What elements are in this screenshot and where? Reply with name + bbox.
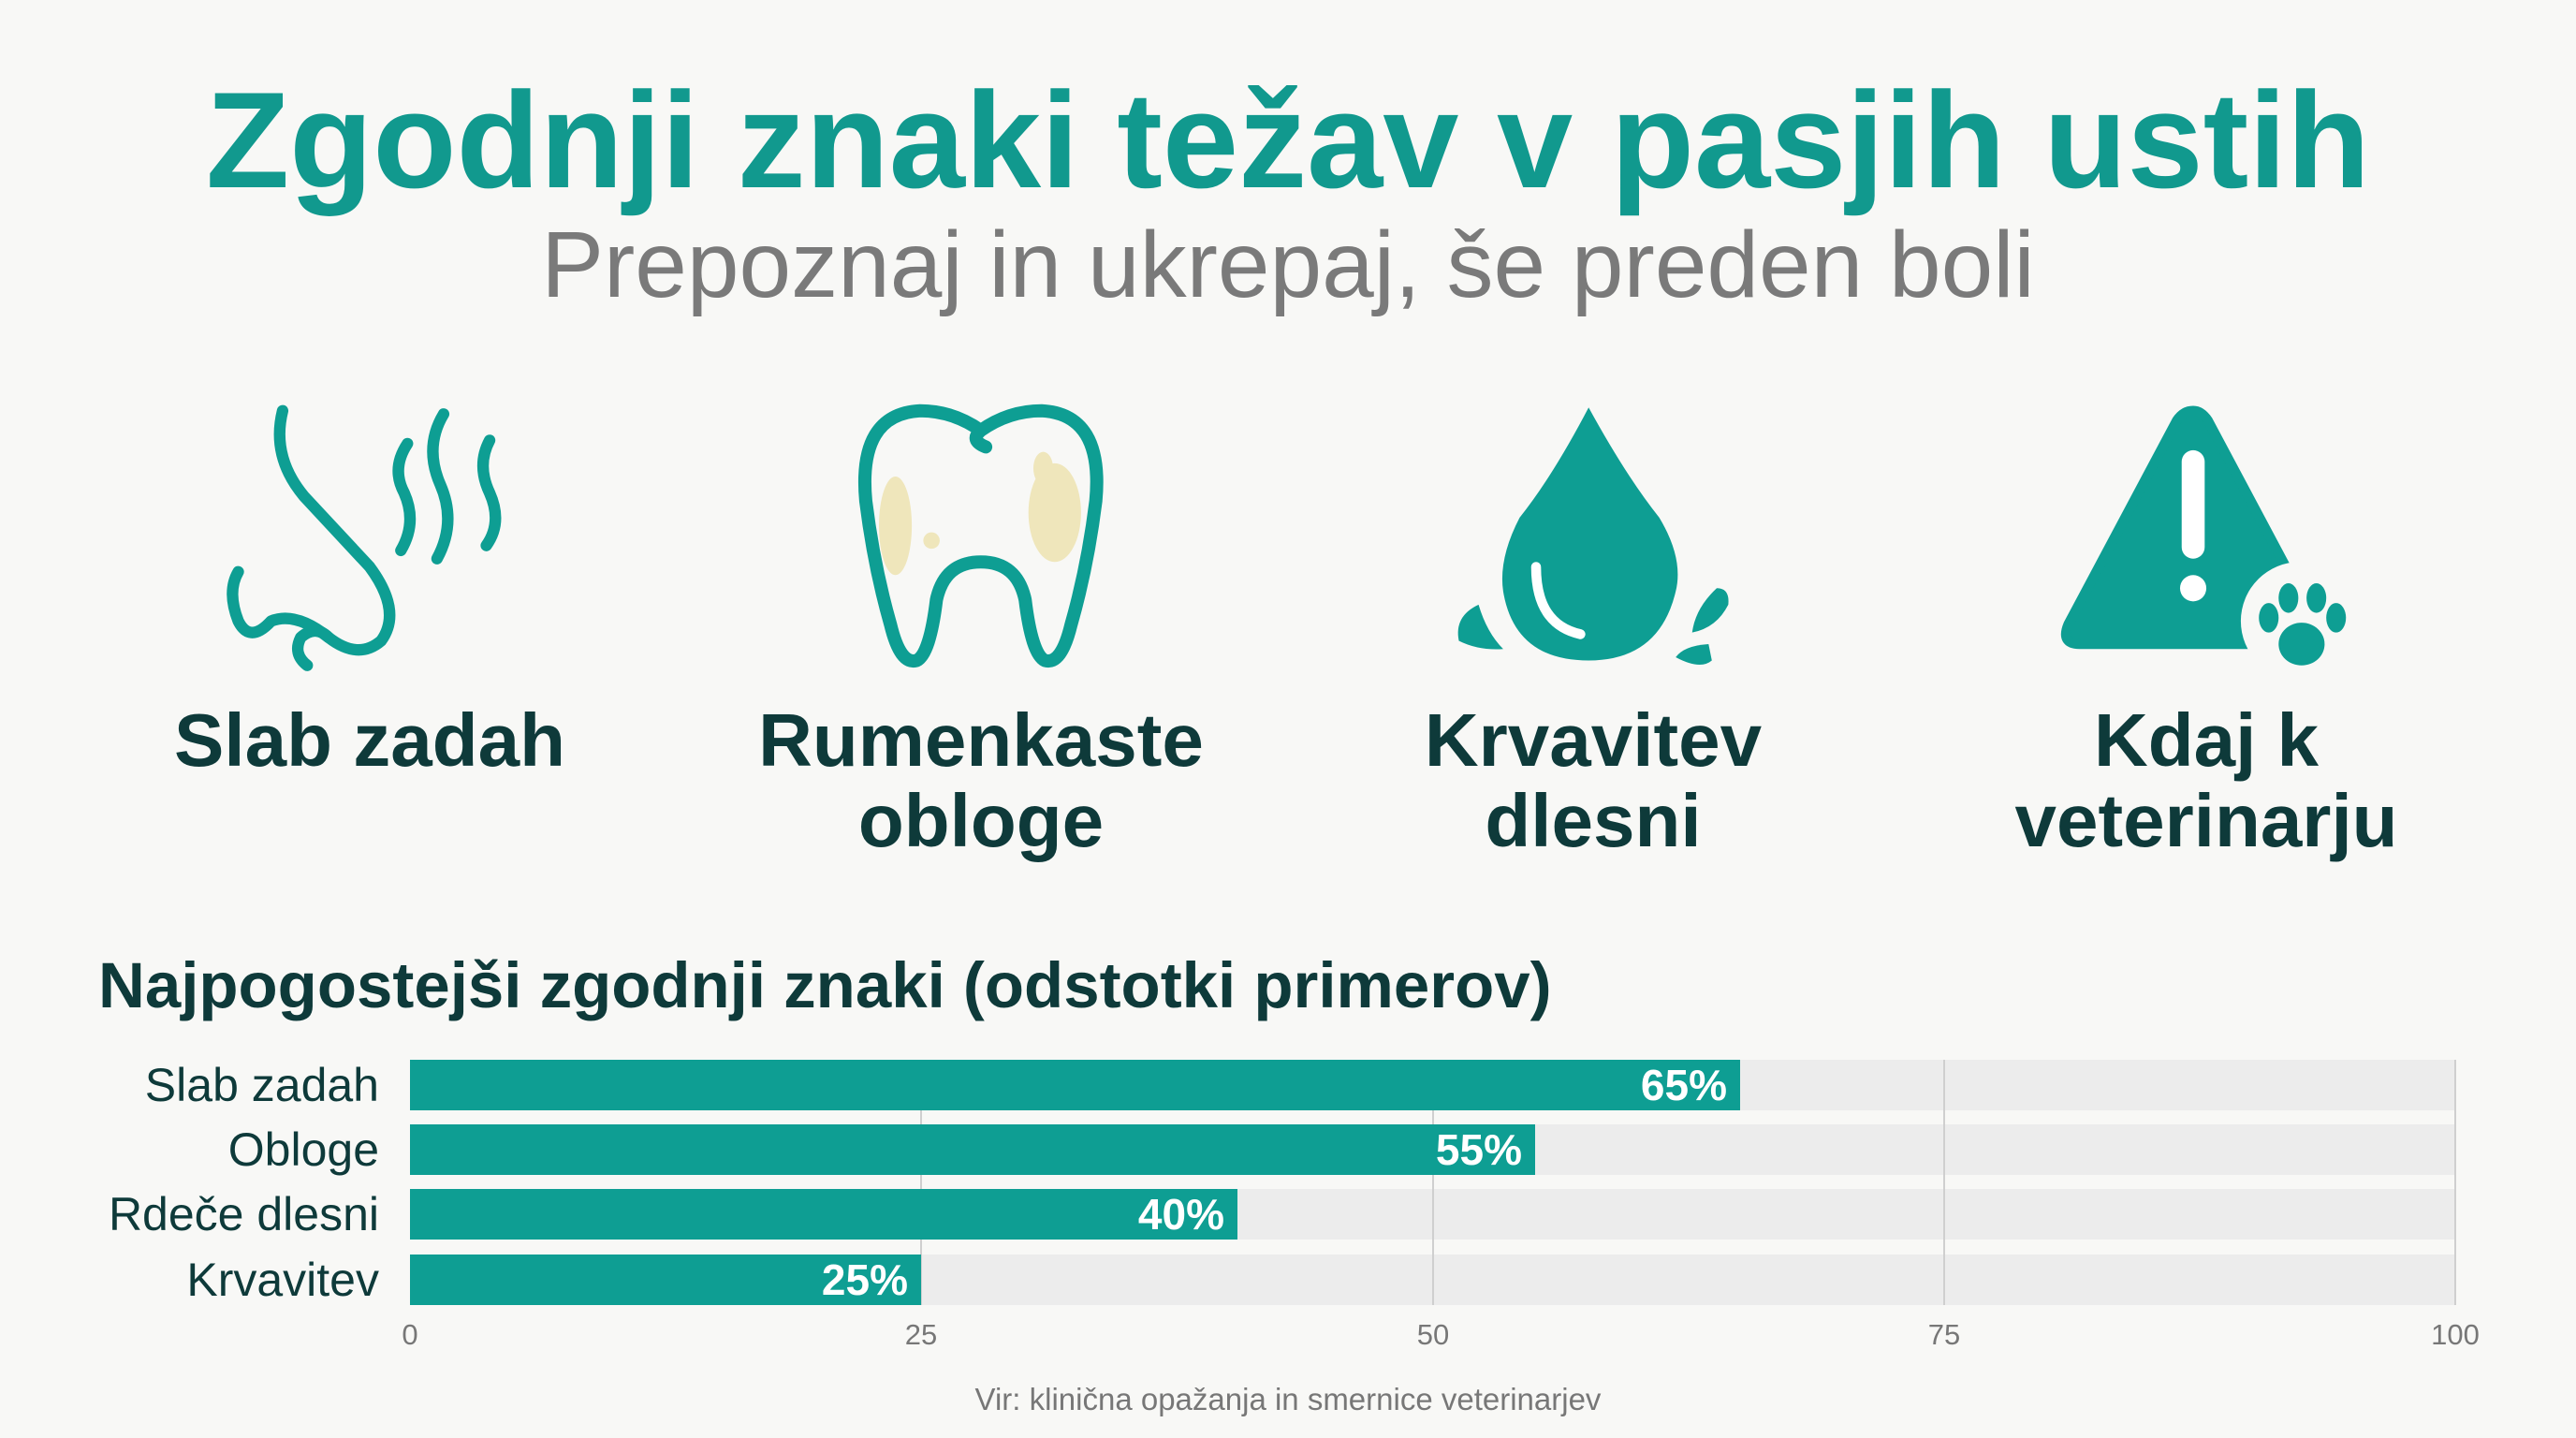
bar chart: Obloge (228, 1123, 379, 1176)
bar chart: 100 (2431, 1318, 2480, 1351)
label: Kdaj k veterinarju: Kdaj k (2094, 698, 2319, 782)
bar chart: Slab zadah (145, 1059, 379, 1111)
chart title: Najpogostejši zgodnji znaki (odstotki primerov) (98, 949, 1552, 1021)
bar: Rdeče dlesni 40%: 40% (1138, 1190, 1224, 1239)
subtitle: Prepoznaj in ukrepaj, še preden boli (541, 213, 2035, 317)
bar: Rdeče dlesni 40% (410, 1189, 1237, 1240)
bar chart: 0 (402, 1318, 418, 1351)
label: Slab zadah: Slab zadah (174, 698, 565, 782)
source: Vir: klinična opažanja in smernice veterinarjev (975, 1382, 1601, 1416)
label: Krvavitev dlesni: dlesni (1485, 779, 1702, 862)
bar: Obloge 55%: 55% (1436, 1125, 1522, 1174)
label: Kdaj k veterinarju: veterinarju (2014, 779, 2398, 862)
icon: blood drop (1458, 407, 1729, 665)
label: Rumenkaste obloge (758, 698, 1204, 862)
bar: Krvavitev 25% (410, 1255, 921, 1305)
bar chart (109, 1059, 2480, 1351)
label: Krvavitev dlesni: Krvavitev (1425, 698, 1762, 782)
icon: nose with smell (232, 411, 495, 666)
label: Rumenkaste obloge: Rumenkaste (758, 698, 1204, 782)
label: Krvavitev dlesni (1425, 698, 1762, 862)
label: Kdaj k veterinarju (2014, 698, 2398, 862)
bar: Krvavitev 25%: 25% (822, 1255, 908, 1304)
bar chart: 25 (905, 1318, 937, 1351)
title: Zgodnji znaki težav v pasjih ustih (206, 64, 2370, 216)
bar chart: 75 (1928, 1318, 1960, 1351)
bar: Slab zadah 65%: 65% (1641, 1061, 1727, 1109)
label: Rumenkaste obloge: obloge (858, 779, 1104, 862)
bar chart: Krvavitev (186, 1254, 379, 1306)
bar: Obloge 55% (410, 1124, 1535, 1175)
bar: Slab zadah 65% (410, 1060, 1740, 1110)
icon: warning with paw (2066, 411, 2359, 681)
bar chart: 50 (1417, 1318, 1449, 1351)
bar chart: Rdeče dlesni (109, 1188, 379, 1240)
icon: tooth with plaque (865, 411, 1097, 661)
